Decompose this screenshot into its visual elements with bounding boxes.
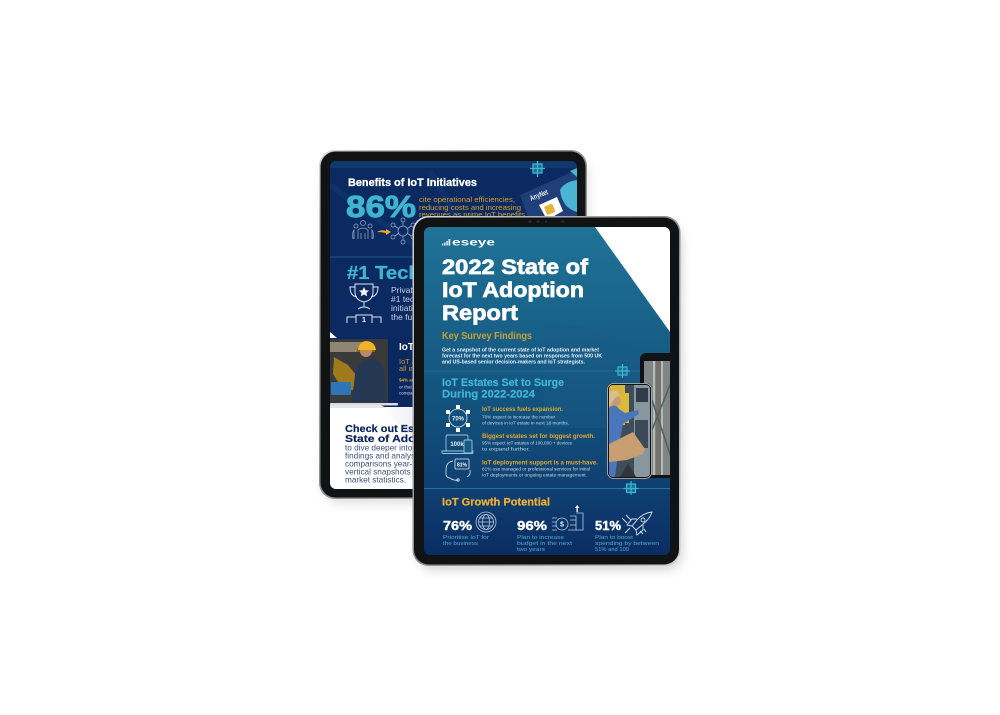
icon: trophy (347, 284, 381, 324)
stat: 96%: Plan to increase (517, 535, 564, 541)
icon: globe (476, 512, 496, 532)
icon: arrow (377, 229, 391, 235)
icon: 81% headset: 81% (457, 462, 468, 468)
text: item 1: of devices in IoT estate in next 18 months. (482, 420, 569, 426)
stat: 76%: the business (443, 541, 478, 547)
text: call to action body (345, 444, 412, 482)
tablet: back device (319, 150, 588, 503)
text: benefits description: revenues as prime IoT benefits (419, 210, 525, 219)
text: technology description (391, 287, 412, 320)
text: item 3: IoT deployments or ongoing estate management. (482, 472, 587, 478)
icon: coins and arrow: $ (560, 522, 564, 528)
logo: eseye (442, 239, 494, 248)
heading: IoT estates: IoT Estates Set to Surge (442, 377, 564, 389)
stat: 96%: two years (517, 547, 545, 553)
stat: 51%: 51% (595, 518, 621, 533)
image: rear phone (640, 353, 670, 478)
stat: 86%: 86% (346, 189, 416, 224)
icon: people group (353, 220, 373, 239)
title: IoT Adoption (442, 279, 584, 302)
panel: back tablet screen (330, 161, 577, 489)
text: benefits description: cite operational efficiencies, (419, 195, 515, 204)
text: technology description: initiative for (391, 303, 434, 313)
text: item 1: 70% expect to increase the number (482, 414, 555, 420)
stat: 96% (517, 518, 572, 553)
text: technology description: #1 technology (391, 294, 445, 304)
panel: call to action (330, 405, 412, 489)
text: item 1: IoT success fuels expansion. (482, 406, 563, 413)
image: AnyNet SIM card (520, 168, 577, 220)
heading: IoT: IoT Estates (399, 342, 453, 353)
icon: 100k laptop and tablet (442, 435, 473, 454)
text: item 1 (482, 406, 569, 424)
icon: 70% device network: 70% (452, 416, 465, 422)
text: benefits description: reducing costs and increasing (419, 203, 521, 212)
text: item 3: IoT deployment support is a must-have. (482, 460, 598, 466)
stat: 76% (443, 520, 489, 545)
heading: IoT estates: During 2022-2024 (442, 388, 536, 400)
heading: check out: State of Adoption (345, 433, 445, 445)
image: front phone (607, 383, 652, 479)
text: call to action body: comparisons year-over (345, 460, 429, 468)
icon: trophy: 1 (362, 317, 366, 324)
heading: IoT estates (442, 377, 564, 400)
heading: number one technology: #1 Technology (347, 263, 487, 283)
text: call to action body: findings and analysis, (345, 452, 423, 460)
image: engineer on laptop (330, 339, 388, 404)
title (442, 256, 589, 325)
icon: coins and arrow (552, 505, 583, 530)
text: item 2: 95% expect IoT estates of 100,000 + devices (482, 440, 573, 446)
text: panel description: all industries (399, 364, 441, 373)
stat: 76%: 76% (443, 518, 472, 533)
heading: benefits: Benefits of IoT Initiatives (348, 177, 477, 189)
text: intro: Get a snapshot of the current state of IoT adoption and market (442, 348, 599, 354)
stat: 96%: 96% (517, 518, 547, 533)
text: intro (442, 348, 602, 366)
icon: rocket (622, 512, 652, 535)
title: Report (442, 302, 518, 325)
icon: 100k laptop and tablet: 100k (450, 442, 464, 448)
text: call to action body: vertical snapshots and (345, 468, 427, 476)
panel: laptop section (330, 332, 412, 406)
text: intro: forecast for the next two years based on responses from 500 UK (442, 354, 602, 360)
text: intro: and US-based senior decision-makers and IoT strategists. (442, 360, 586, 366)
icon: network (391, 218, 415, 244)
text: call to action body: market statistics. (345, 476, 406, 484)
logo: eseye: eseye (452, 236, 495, 248)
icon: camera dots (528, 220, 564, 223)
icon: connector node lower (624, 481, 638, 495)
icon: 70% device network (446, 405, 470, 432)
stat: 51% (595, 518, 659, 553)
image: laptop base (330, 403, 398, 406)
text: item 2: Biggest estates set for biggest growth. (482, 433, 595, 440)
icon: connector node (530, 161, 545, 177)
heading: check out: Check out Eseye's (345, 423, 441, 435)
text: call to action body: to dive deeper into the (345, 444, 426, 452)
text: technology description: Private networks (391, 285, 454, 295)
stat: 51%: 51% and 100 (595, 547, 629, 553)
stat: 76%: Prioritise IoT for (443, 535, 489, 541)
panel: front tablet screen (424, 227, 680, 555)
stat: 51%: Plan to boost (595, 535, 633, 541)
text: item 2 (482, 433, 595, 452)
text: panel description: $4% adoption (399, 378, 429, 382)
heading: check out (345, 424, 412, 442)
text: panel description: IoT adoption across (399, 357, 465, 366)
text: panel description: or that plan to (399, 384, 427, 390)
text: item 2: to expand further. (482, 446, 530, 452)
text: panel description: compare (399, 390, 417, 396)
stat: 51%: spending by between (595, 541, 659, 547)
subtitle: Key Survey Findings (442, 330, 532, 342)
heading: growth potential: IoT Growth Potential (442, 496, 550, 508)
image: AnyNet SIM card: AnyNet (528, 187, 550, 203)
text: item 3: 81% use managed or professional services for initial (482, 466, 590, 472)
icon: connector node upper (615, 364, 630, 378)
text: panel description (399, 359, 412, 396)
stat: 96%: budget in the next (517, 541, 572, 547)
icon: 81% headset (446, 459, 470, 481)
tablet: front device (412, 216, 682, 570)
text: item 3 (482, 460, 598, 478)
text: technology description: the future (391, 312, 427, 322)
text: benefits description (419, 196, 525, 217)
title: 2022 State of (442, 256, 589, 279)
